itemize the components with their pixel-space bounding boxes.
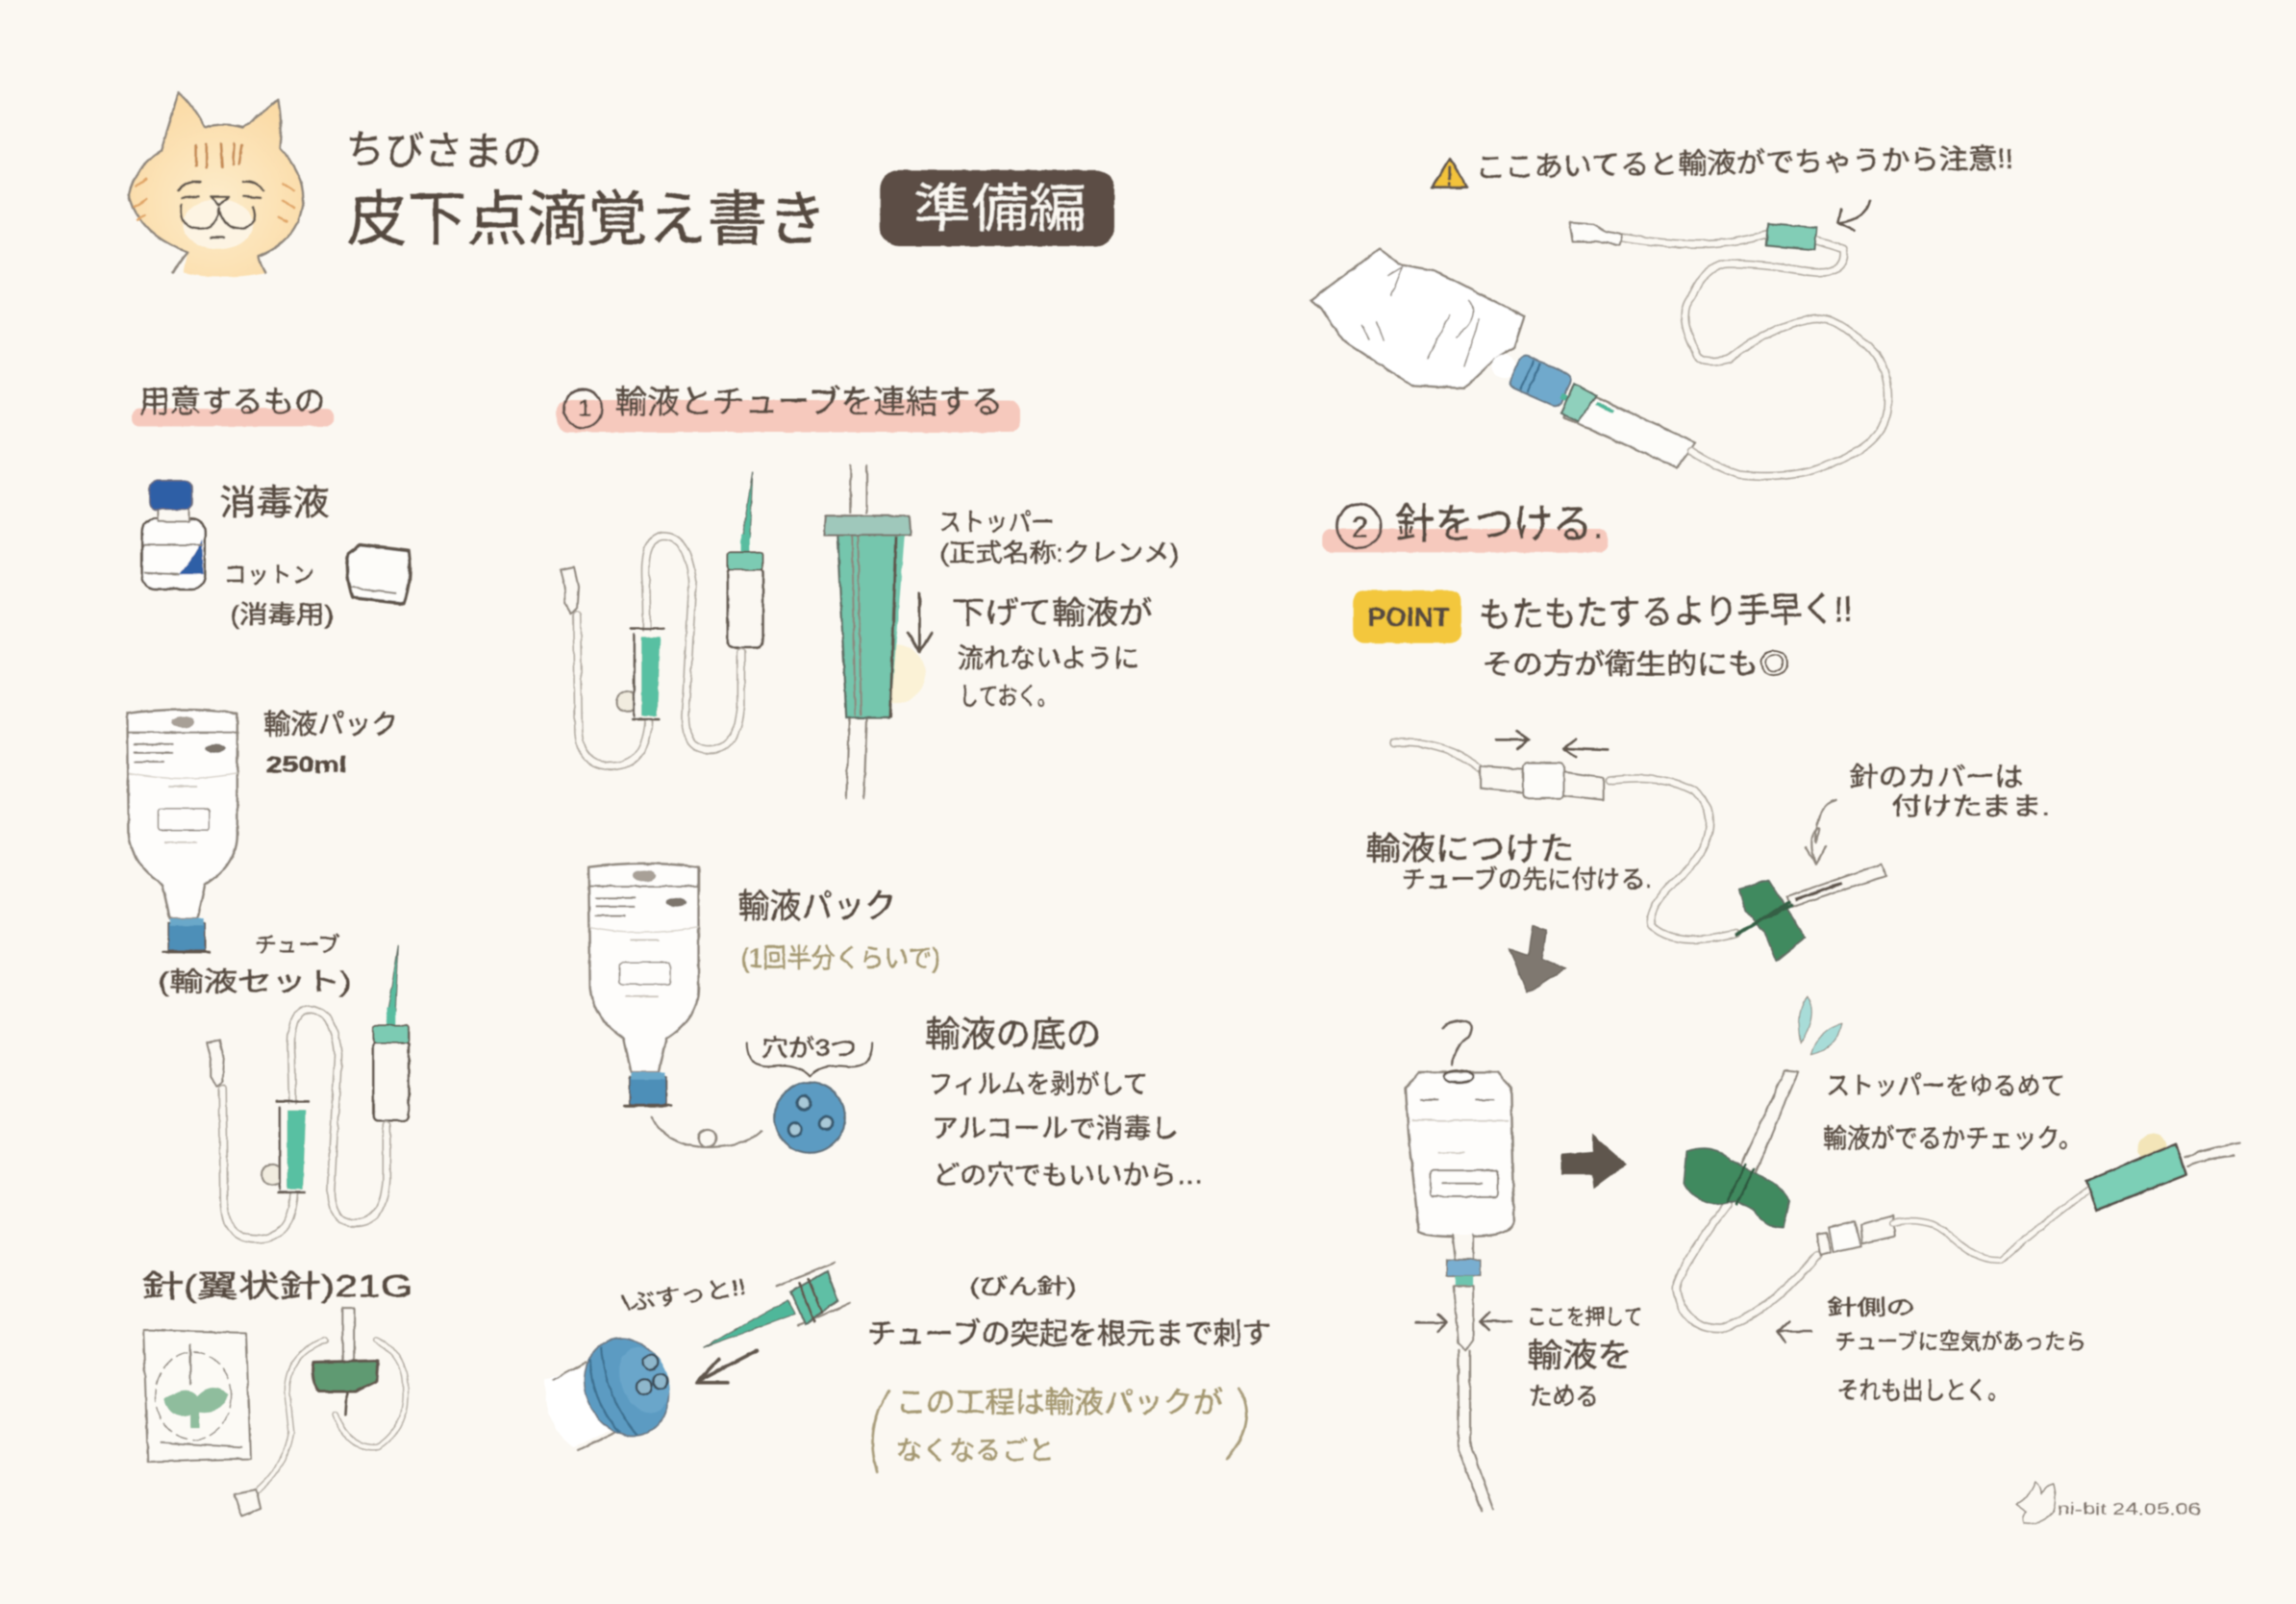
text: loosen stopper note: 輸液がでるかチェック。 — [1823, 1123, 2083, 1153]
text: bag note — [738, 888, 940, 973]
text: point note: その方が衛生的にも◎ — [1482, 650, 1789, 681]
title: ちびさまの — [345, 128, 542, 175]
text: air note: 針側の — [1828, 1296, 1915, 1319]
text: point note: もたもたするより手早く!! — [1479, 589, 1853, 635]
callout: three holes — [652, 1036, 873, 1153]
icon: needle with air check and stopper — [1677, 1070, 2240, 1329]
text: tube label: (輸液セット) — [158, 966, 352, 996]
text: bag bottom instructions — [926, 1015, 1204, 1190]
arrow: big right — [1560, 1134, 1627, 1190]
text: loosen stopper note: ストッパーをゆるめて — [1826, 1073, 2064, 1100]
text: warning: ここあいてると輸液がでちゃうから注意!! — [1476, 144, 2013, 184]
heading: step 1: 輸液とチューブを連結する — [615, 385, 1003, 420]
badge: 準備編: 準備編 — [913, 178, 1086, 238]
text: bag bottom instructions: 輸液の底の — [926, 1015, 1101, 1054]
text: stopper notes: しておく。 — [960, 684, 1058, 711]
icon: infusion bag — [127, 710, 237, 952]
text: squeeze note: 輸液を — [1527, 1339, 1633, 1374]
heading: step 1 — [557, 385, 1021, 432]
text: needle label: 針(翼状針)21G — [142, 1268, 412, 1303]
text: bag bottom instructions: アルコールで消毒し — [932, 1113, 1179, 1142]
icon: stopper clamp — [824, 465, 926, 798]
text: infusion bag label: 輸液パック — [263, 710, 398, 740]
arrow: push spike — [697, 1350, 757, 1383]
text: squeeze note: ここを押して — [1527, 1304, 1643, 1329]
heading: step 1: 1 — [579, 396, 591, 422]
heading: step 2: 針をつける. — [1395, 501, 1604, 547]
text: air note — [1828, 1296, 2086, 1405]
icon: connector with needle — [1394, 742, 1886, 961]
text: disinfectant and cotton labels: (消毒用) — [230, 601, 334, 629]
text: air note: チューブに空気があったら — [1834, 1329, 2086, 1354]
signature: ni-bit 24.05.06 — [2058, 1499, 2201, 1518]
icon: bag connected to tube — [1310, 223, 1888, 476]
text: squeeze note — [1527, 1304, 1643, 1411]
text: infusion bag label: 250ml — [266, 752, 347, 777]
icon: water drops — [1799, 996, 1842, 1055]
callout: process note — [873, 1387, 1247, 1472]
callout: three holes: 穴が3つ — [761, 1036, 857, 1062]
text: air note: それも出しとく。 — [1837, 1377, 2009, 1405]
text: stopper notes: ストッパー — [938, 510, 1055, 537]
text: cover note: 針のカバーは — [1849, 762, 2024, 791]
text: infusion bag label — [263, 710, 398, 777]
text: disinfectant and cotton labels: コットン — [224, 563, 314, 589]
text: cover note — [1849, 762, 2050, 820]
icon: spike into bag port — [545, 1263, 849, 1450]
arrow: warning pointer — [1837, 201, 1870, 230]
text: spike instructions: チューブの突起を根元まで刺す — [867, 1318, 1271, 1351]
callout: process note: この工程は輸液パックが — [896, 1387, 1223, 1419]
heading: step 2: 2 — [1352, 511, 1368, 543]
text: disinfectant and cotton labels: 消毒液 — [219, 483, 330, 522]
badge: POINT: POINT — [1367, 602, 1450, 632]
text: attach instruction — [1366, 832, 1652, 893]
text: tube label — [158, 932, 352, 996]
icon: cotton — [347, 545, 410, 604]
text: stopper notes: (正式名称:クレンメ) — [940, 539, 1179, 567]
heading: step 2 — [1322, 501, 1608, 552]
text: spike instructions — [620, 1273, 1271, 1351]
text: spike instructions: (びん針) — [969, 1273, 1076, 1298]
arrows: join connector — [1496, 731, 1608, 758]
callout: process note: なくなるごと — [896, 1435, 1055, 1465]
arrow: cover pointer — [1806, 800, 1836, 865]
text: squeeze note: ためる — [1529, 1384, 1599, 1411]
title — [345, 128, 827, 254]
text: cover note: 付けたまま. — [1892, 792, 2050, 820]
text: bag bottom instructions: フィルムを剥がして — [929, 1069, 1148, 1099]
text: disinfectant and cotton labels — [219, 483, 334, 629]
icon: warning triangle — [1432, 159, 1467, 188]
text: bag bottom instructions: どの穴でもいいから… — [933, 1160, 1204, 1190]
arrow: air pointer — [1778, 1321, 1811, 1341]
text: bag note: (1回半分くらいで) — [741, 943, 940, 973]
text: stopper notes: 流れないように — [958, 642, 1139, 672]
text: attach instruction: チューブの先に付ける. — [1401, 865, 1652, 893]
icon: disinfectant bottle — [142, 481, 205, 589]
text: bag note: 輸液パック — [738, 888, 896, 925]
text: stopper notes: 下げて輸液が — [952, 595, 1153, 630]
icon: orange cat face — [129, 92, 303, 277]
arrow: big down — [1510, 926, 1565, 993]
arrow: stopper down — [908, 593, 932, 652]
signature — [2016, 1482, 2201, 1524]
text: attach instruction: 輸液につけた — [1366, 832, 1574, 867]
icon: tube set step 1 — [561, 472, 762, 766]
heading: 用意するもの: 用意するもの — [139, 384, 325, 418]
arrows: squeeze chamber — [1416, 1313, 1511, 1332]
icon: packaged winged needle — [143, 1330, 250, 1462]
text: point note — [1479, 589, 1853, 681]
badge: POINT — [1353, 590, 1461, 643]
badge: 準備編 — [880, 170, 1114, 246]
text: loosen stopper note — [1823, 1073, 2083, 1153]
icon: hanging bag with chamber — [1406, 1021, 1514, 1512]
text: tube label: チューブ — [255, 932, 339, 957]
text: stopper notes — [938, 510, 1179, 711]
title: 皮下点滴覚え書き — [347, 187, 827, 254]
text: spike instructions: \ぶすっと!! — [620, 1274, 747, 1316]
icon: infusion bag step 1 — [588, 864, 698, 1106]
icon: winged needle — [235, 1308, 406, 1516]
icon: infusion tube set — [207, 944, 409, 1240]
